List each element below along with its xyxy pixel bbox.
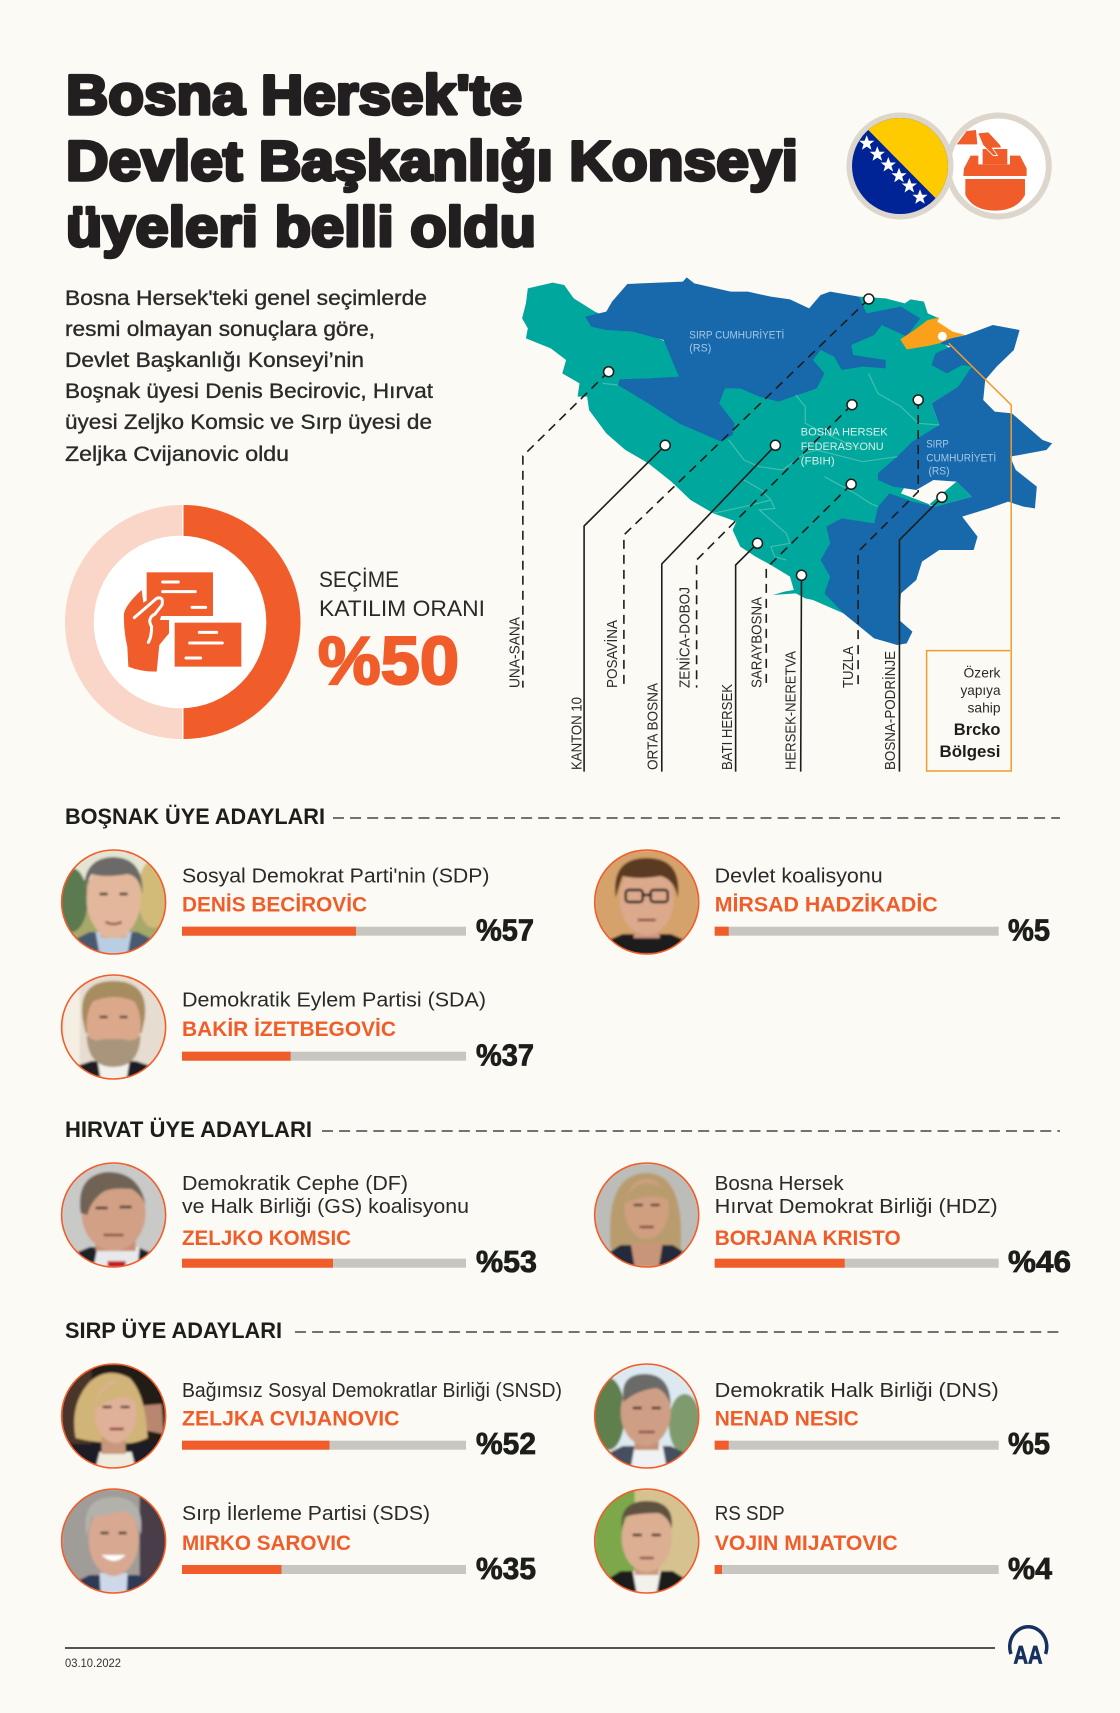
photo: Zeljka Cvijanovic [62, 1364, 166, 1468]
candidate: Borjana Kristo [595, 1163, 1071, 1279]
candidate: Denis Becirovic: DENİS BECİROVİC [182, 893, 367, 917]
map region labels: (FBIH) [801, 455, 835, 467]
candidate: Zeljko Komsic: %53 [476, 1244, 537, 1279]
map region labels: FEDERASYONU [801, 441, 884, 453]
photo: Denis Becirovic [56, 850, 170, 954]
candidate: Zeljko Komsic [62, 1163, 537, 1279]
photo: Vojin Mijatovic [595, 1489, 699, 1593]
candidate: Mirko Sarovic: MIRKO SAROVIC [182, 1531, 351, 1555]
section: Bosniak candidates [56, 804, 1060, 1079]
candidate: Bakir Izetbegovic [62, 975, 534, 1079]
candidate: Zeljka Cvijanovic [62, 1364, 562, 1468]
bar: %5 [715, 1441, 999, 1450]
title: Devlet Başkanlığı Konseyi [66, 129, 798, 192]
intro text: Boşnak üyesi Denis Becirovic, Hırvat [65, 380, 433, 403]
candidate: Borjana Kristo: Hırvat Demokrat Birliği (HDZ) [715, 1196, 998, 1218]
bar: %57 [182, 927, 466, 936]
map region labels: SIRP [926, 439, 949, 451]
candidate: Mirsad Hadzikadic: MİRSAD HADZİKADİC [715, 893, 938, 917]
bar: %46 [715, 1259, 999, 1268]
intro text [65, 287, 433, 466]
map: Brcko district [900, 317, 965, 349]
candidate: Borjana Kristo: %46 [1008, 1244, 1071, 1279]
candidate: Zeljka Cvijanovic: %52 [476, 1426, 536, 1461]
title: Bosna Hersek'te [66, 63, 522, 126]
photo: Mirko Sarovic [62, 1489, 170, 1593]
turnout label [318, 567, 485, 699]
bar: %35 [182, 1565, 466, 1574]
map region labels: BOSNA HERSEK [801, 427, 888, 439]
candidate: Mirko Sarovic: Sırp İlerleme Partisi (SDS) [182, 1502, 430, 1525]
map: Republika Srpska east [821, 325, 1052, 645]
candidate: Bakir Izetbegovic: BAKİR İZETBEGOVİC [182, 1017, 396, 1041]
photo: Zeljko Komsic [62, 1163, 166, 1267]
candidate: Zeljka Cvijanovic: ZELJKA CVIJANOVIC [182, 1407, 400, 1431]
candidate: Nenad Nesic: Demokratik Halk Birliği (DNS) [715, 1380, 999, 1402]
footer rule [65, 1647, 995, 1649]
map region labels: SIRP CUMHURİYETİ [689, 328, 784, 341]
canton labels: KANTON 10 [568, 697, 585, 770]
canton labels: UNA-SANA [506, 617, 523, 688]
bar: %52 [182, 1441, 466, 1450]
map: federation territory [522, 283, 972, 638]
bar: %37 [182, 1052, 466, 1061]
canton labels: TUZLA [840, 646, 857, 688]
candidate: Denis Becirovic [56, 850, 534, 954]
intro text: Zeljka Cvijanovic oldu [65, 443, 289, 466]
leader lines [523, 299, 942, 772]
Brcko callout text: yapıya [960, 682, 1001, 698]
canton labels: SARAYBOSNA [748, 597, 765, 688]
logo: AA [1010, 1627, 1047, 1670]
Brcko callout text: Bölgesi [940, 742, 1000, 761]
candidate: Denis Becirovic: %57 [476, 913, 534, 948]
donut chart: turnout [65, 505, 300, 739]
section: Serb candidates [62, 1318, 1060, 1593]
candidate: Borjana Kristo: Bosna Hersek [715, 1173, 845, 1195]
candidate: Vojin Mijatovic: RS SDP [715, 1503, 785, 1525]
heading: Serb: SIRP ÜYE ADAYLARI [65, 1318, 282, 1343]
candidate: Mirsad Hadzikadic: Devlet koalisyonu [715, 865, 883, 887]
candidate: Borjana Kristo: BORJANA KRISTO [715, 1226, 901, 1250]
canton labels: HERSEK-NERETVA [782, 651, 799, 770]
canton labels: ORTA BOSNA [645, 683, 662, 770]
map: Bosnia and Herzegovina regions [506, 277, 1052, 772]
map region labels: CUMHURİYETİ [926, 452, 996, 465]
photo: Mirsad Hadzikadic [595, 850, 699, 954]
map region labels: (RS) [689, 343, 711, 355]
canton labels: BATI HERSEK [719, 684, 736, 770]
icon: hand holding ballots [124, 572, 241, 672]
map region labels [689, 328, 996, 477]
candidate: Bakir Izetbegovic: %37 [476, 1038, 534, 1072]
candidate: Zeljka Cvijanovic: Bağımsız Sosyal Demokratlar Birliği (SNSD) [182, 1380, 562, 1402]
section: Croat candidates [62, 1117, 1071, 1279]
candidate: Zeljko Komsic: ve Halk Birliği (GS) koalisyonu [182, 1196, 469, 1218]
Brcko callout frame [927, 343, 1011, 771]
map region labels: (RS) [928, 465, 950, 477]
bar: %53 [182, 1259, 466, 1268]
turnout label: SEÇİME [319, 567, 399, 592]
candidate: Mirko Sarovic [62, 1489, 536, 1593]
heading: Croat: HIRVAT ÜYE ADAYLARI [65, 1117, 312, 1142]
candidate: Mirsad Hadzikadic: %5 [1008, 913, 1050, 948]
candidate: Denis Becirovic: Sosyal Demokrat Parti'nin (SDP) [182, 865, 490, 887]
Brcko callout text: sahip [968, 700, 1001, 716]
intro text: Devlet Başkanlığı Konseyi’nin [65, 349, 364, 372]
candidate: Vojin Mijatovic: %4 [1008, 1551, 1053, 1586]
candidate: Vojin Mijatovic [595, 1489, 1053, 1593]
Brcko callout text: Özerk [964, 664, 1001, 681]
heading: Bosniak: BOŞNAK ÜYE ADAYLARI [65, 804, 325, 829]
intro text: Bosna Hersek'teki genel seçimlerde [65, 287, 427, 310]
candidate: Bakir Izetbegovic: Demokratik Eylem Partisi (SDA) [182, 990, 486, 1012]
candidate: Zeljko Komsic: Demokratik Cephe (DF) [182, 1173, 408, 1195]
candidate: Zeljko Komsic: ZELJKO KOMSIC [182, 1226, 351, 1250]
canton labels: ZENİCA-DOBOJ [676, 587, 694, 688]
Brcko callout text [940, 664, 1001, 761]
canton labels [506, 587, 899, 770]
turnout label: %50 [318, 623, 459, 699]
candidate: Mirsad Hadzikadic [595, 850, 1050, 954]
canton labels: BOSNA-PODRİNJE [881, 651, 899, 770]
photo: Nenad Nesic [593, 1364, 701, 1468]
bar: %4 [715, 1565, 999, 1574]
candidate: Nenad Nesic [593, 1364, 1050, 1468]
date: 03.10.2022 [65, 1658, 121, 1670]
candidate: Nenad Nesic: NENAD NESIC [715, 1407, 859, 1431]
candidate: Nenad Nesic: %5 [1008, 1426, 1050, 1461]
icon: ballot box [948, 116, 1049, 216]
candidate: Mirko Sarovic: %35 [476, 1551, 536, 1586]
map: Republika Srpska north [585, 277, 920, 442]
title: üyeleri belli oldu [66, 195, 536, 258]
photo: Borjana Kristo [595, 1163, 699, 1267]
photo: Bakir Izetbegovic [62, 975, 166, 1079]
intro text: üyesi Zeljko Komsic ve Sırp üyesi de [65, 411, 432, 434]
candidate: Vojin Mijatovic: VOJIN MIJATOVIC [715, 1531, 898, 1555]
canton labels: POSAVİNA [603, 620, 621, 688]
intro text: resmi olmayan sonuçlara göre, [65, 318, 375, 341]
turnout label: KATILIM ORANI [319, 596, 485, 621]
icon: Bosnia flag [846, 112, 954, 220]
Brcko callout text: Brcko [954, 720, 1000, 739]
logo: AA: AA [1014, 1642, 1042, 1670]
title [66, 63, 798, 258]
bar: %5 [715, 927, 999, 936]
map pins [604, 294, 947, 580]
